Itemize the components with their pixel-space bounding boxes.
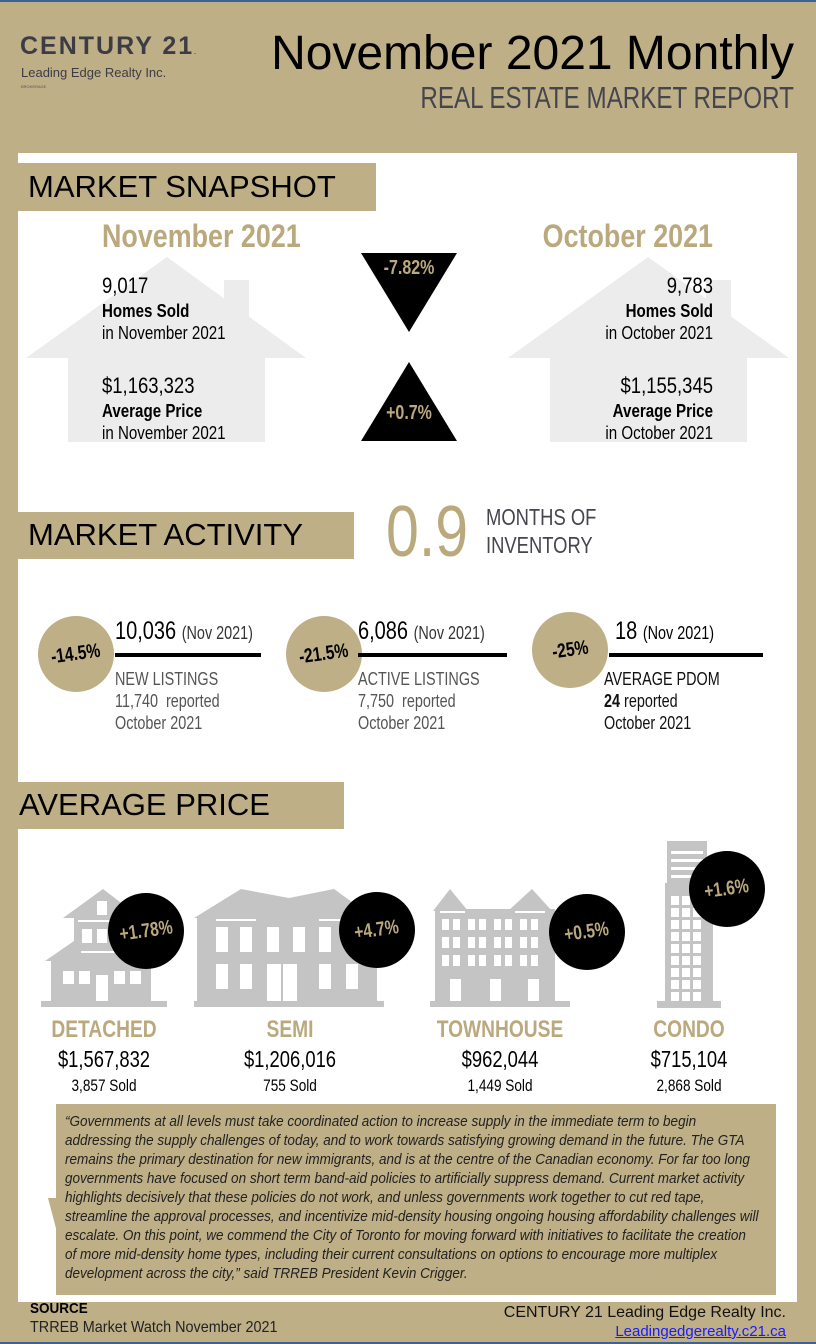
November 2021 column <box>102 218 301 443</box>
badge: detached change <box>108 893 184 969</box>
label: townhouse <box>436 1016 563 1095</box>
quote callout: addressing the supply challenges of today, and to work towards satisfying growing demand in the future. The GTA <box>65 1132 744 1149</box>
label: townhouse: 1,449 Sold <box>467 1076 533 1095</box>
label: detached <box>51 1016 157 1095</box>
months of inventory <box>386 492 596 572</box>
stat: new listings: 11,740 reported <box>115 691 220 711</box>
heading: market snapshot: MARKET SNAPSHOT <box>28 169 336 204</box>
label: condo: $715,104 <box>651 1046 727 1072</box>
October 2021 column: Homes Sold <box>626 301 713 321</box>
November 2021 column: November 2021 <box>102 218 301 254</box>
heading: market activity: MARKET ACTIVITY <box>28 517 303 552</box>
badge: townhouse change: +0.5% <box>563 918 611 946</box>
badge: semi change: +4.7% <box>353 916 401 944</box>
October 2021 column: in October 2021 <box>605 323 713 343</box>
quote callout: “Governments at all levels must take coordinated action to increase supply in the immediate term to begin <box>65 1113 696 1130</box>
title: November 2021 Monthly <box>271 27 794 80</box>
footer: company <box>504 1304 786 1340</box>
stat: active listings <box>286 616 507 733</box>
icon: condo tower <box>657 841 721 1008</box>
label: semi: $1,206,016 <box>244 1046 336 1072</box>
footer: company: CENTURY 21 Leading Edge Realty Inc. <box>504 1304 786 1321</box>
stat: average PDOM: October 2021 <box>604 713 691 733</box>
icon: townhouse <box>430 889 570 1007</box>
stat: active listings: October 2021 <box>358 713 445 733</box>
November 2021 column: in November 2021 <box>102 323 226 343</box>
stat: active listings: -21.5% <box>298 639 350 668</box>
footer: source: SOURCE <box>30 1300 88 1317</box>
label: semi <box>244 1016 336 1095</box>
badge: townhouse change <box>549 894 625 970</box>
label: detached: $1,567,832 <box>58 1046 150 1072</box>
label: townhouse: TOWNHOUSE <box>437 1016 563 1043</box>
label: semi: SEMI <box>267 1016 313 1043</box>
label: condo <box>650 1016 727 1095</box>
stat: new listings <box>38 616 261 733</box>
November 2021 column: Average Price <box>102 401 202 421</box>
stat: active listings: 7,750 reported <box>358 691 456 711</box>
stat: average PDOM: -25% <box>550 636 589 663</box>
label: semi: 755 Sold <box>263 1076 317 1095</box>
November 2021 column: $1,163,323 <box>102 373 194 398</box>
stat: average PDOM: AVERAGE PDOM <box>604 669 720 689</box>
label: detached: DETACHED <box>51 1016 157 1043</box>
heading: average price: AVERAGE PRICE <box>19 787 270 822</box>
quote callout: streamline the approval processes, and incentivize mid-density housing ongoing housing affordability challenges will <box>65 1208 759 1225</box>
arrow down: homes sold change <box>361 253 457 332</box>
label: condo: CONDO <box>653 1016 725 1043</box>
subtitle: REAL ESTATE MARKET REPORT <box>420 80 794 115</box>
October 2021 column: 9,783 <box>667 273 713 298</box>
stat: average PDOM: 18 (Nov 2021) <box>615 617 714 645</box>
icon: semi house <box>194 889 384 1007</box>
logo: BROKERAGE <box>21 84 46 89</box>
November 2021 column: 9,017 <box>102 273 148 298</box>
heading: average price <box>18 782 344 829</box>
label: townhouse: $962,044 <box>462 1046 538 1072</box>
October 2021 column: Average Price <box>613 401 713 421</box>
label: condo: 2,868 Sold <box>656 1076 722 1095</box>
badge: condo change <box>689 851 765 927</box>
quote callout: governments have focused on short term band-aid policies to artificially suppress demand. Current market activity <box>65 1170 744 1187</box>
footer: source <box>30 1300 278 1336</box>
heading: market snapshot <box>18 163 376 211</box>
quote callout: escalate. On this point, we commend the City of Toronto for moving forward with initiatives to facilitate the creation <box>65 1227 746 1244</box>
icon: house left <box>26 257 306 442</box>
November 2021 column: Homes Sold <box>102 301 189 321</box>
quote callout: development across the city,” said TRREB President Kevin Crigger. <box>65 1265 468 1282</box>
October 2021 column: October 2021 <box>543 218 713 254</box>
arrow up: price change <box>361 362 457 441</box>
months of inventory: INVENTORY <box>486 532 593 558</box>
October 2021 column: $1,155,345 <box>621 373 713 398</box>
icon: house right <box>508 257 788 442</box>
arrow down: homes sold change: -7.82% <box>384 257 434 279</box>
icon: detached house <box>41 889 167 1007</box>
months of inventory: MONTHS OF <box>486 504 596 530</box>
months of inventory: 0.9 <box>386 492 468 572</box>
logo <box>20 32 198 89</box>
November 2021 column: in November 2021 <box>102 423 226 443</box>
label: detached: 3,857 Sold <box>71 1076 137 1095</box>
October 2021 column: in October 2021 <box>605 423 713 443</box>
stat: new listings: -14.5% <box>50 639 102 668</box>
stat: active listings: 6,086 (Nov 2021) <box>358 617 485 645</box>
quote callout <box>48 1104 776 1295</box>
badge: semi change <box>339 892 415 968</box>
stat: new listings: 10,036 (Nov 2021) <box>115 617 253 645</box>
quote callout: remains the primary destination for new immigrants, and is at the centre of the Canadian economy. For far too long <box>65 1151 750 1168</box>
arrow up: price change: +0.7% <box>386 402 432 424</box>
stat: average PDOM <box>532 612 763 733</box>
stat: new listings: October 2021 <box>115 713 202 733</box>
stat: average PDOM: 24 reported <box>604 691 678 711</box>
logo: Leading Edge Realty Inc. <box>21 65 166 80</box>
October 2021 column <box>543 218 713 443</box>
stat: new listings: NEW LISTINGS <box>115 669 218 689</box>
quote callout: of more mid-density home types, including their current consultations on options to encourage more multiplex <box>65 1246 717 1263</box>
stat: active listings: ACTIVE LISTINGS <box>358 669 480 689</box>
badge: detached change: +1.78% <box>118 916 174 945</box>
footer: source: TRREB Market Watch November 2021 <box>30 1319 278 1336</box>
logo: CENTURY 21. <box>20 32 198 60</box>
heading: market activity <box>18 512 354 559</box>
badge: condo change: +1.6% <box>703 875 751 903</box>
footer: company: Leadingedgerealty.c21.ca <box>615 1323 786 1340</box>
quote callout: highlights decisively that these policies do not work, and unless governments work together to cut red tape, <box>65 1189 704 1206</box>
